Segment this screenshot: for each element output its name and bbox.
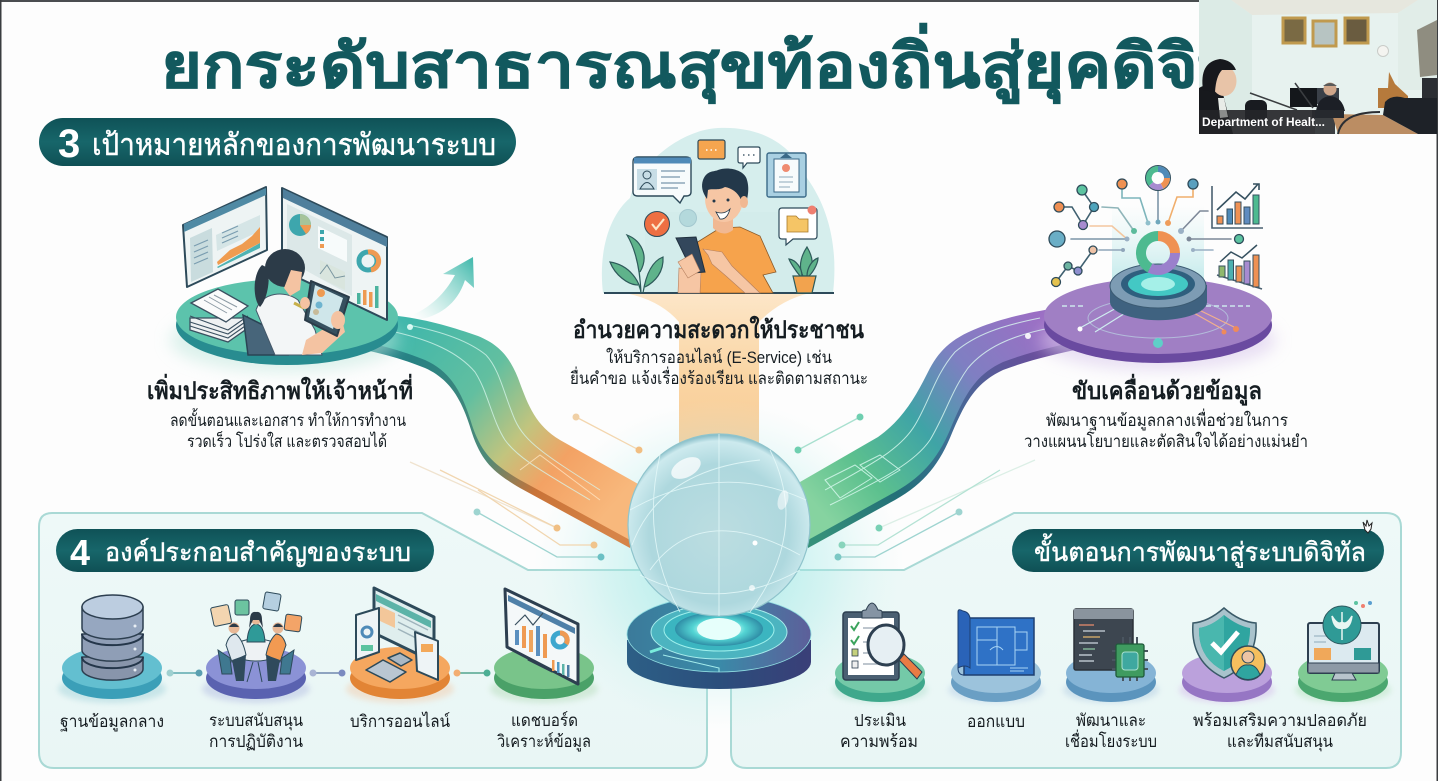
component 3: online services — [346, 588, 454, 731]
top pie icon — [1146, 166, 1170, 190]
label — [209, 711, 303, 751]
chairs — [1383, 97, 1437, 134]
goal text: citizen convenience: ยื่นคำขอ แจ้งเรื่องร้องเรียน และติดตามสถานะ — [570, 366, 868, 388]
bar chart bottom — [1217, 245, 1262, 289]
label — [1193, 711, 1367, 752]
label: ออกแบบ — [967, 712, 1025, 731]
bubble: faint circle — [680, 210, 696, 226]
goal text: staff efficiency: เพิ่มประสิทธิภาพให้เจ้าหน้าที่ — [147, 373, 413, 405]
right platform disc — [1040, 278, 1276, 370]
hub light beam — [1112, 205, 1204, 285]
window blinds — [1417, 20, 1437, 77]
disc — [1179, 653, 1275, 703]
label: ระบบสนับสนุน — [209, 711, 303, 731]
goal text: citizen convenience: ให้บริการออนไลน์ (E-Service) เช่น — [606, 347, 832, 367]
goal text: staff efficiency — [147, 373, 413, 451]
video call overlay: Department of Healt... — [1202, 115, 1325, 129]
hub cylinder — [1110, 264, 1207, 320]
wall frames — [1283, 18, 1368, 46]
label: พร้อมเสริมความปลอดภัย — [1193, 711, 1367, 730]
label — [840, 711, 918, 751]
chair — [243, 315, 288, 355]
disc — [832, 653, 928, 703]
woman — [1199, 85, 1233, 134]
glass sphere — [628, 434, 810, 616]
step 4: security and support team — [1179, 608, 1367, 752]
circuit lines right — [794, 414, 1035, 560]
label: วิเคราะห์ข้อมูล — [497, 732, 591, 752]
goal text: citizen convenience — [570, 315, 868, 388]
monitor and man — [1290, 88, 1317, 107]
officer figure — [255, 249, 349, 355]
goal text: data driven: วางแผนนโยบายและตัดสินใจได้อย่างแม่นยำ — [1024, 431, 1308, 451]
bubble: check badge — [644, 212, 670, 236]
component 1: central database — [58, 595, 166, 732]
person — [676, 168, 776, 293]
caption strip — [1199, 110, 1315, 134]
label: การปฏิบัติงาน — [209, 732, 303, 751]
goal text: citizen convenience: อำนวยความสะดวกให้ประชาชน — [573, 315, 865, 344]
goal text: staff efficiency: ลดขั้นตอนและเอกสาร ทำให้การทำงาน — [170, 408, 406, 430]
icon: monitor with medical symbol — [1308, 601, 1379, 680]
donut chart — [1141, 236, 1175, 270]
step 3: develop and integrate — [1063, 609, 1159, 751]
wall clock — [1378, 46, 1388, 56]
step 5: launch on monitor — [1295, 601, 1391, 703]
disc — [490, 647, 598, 703]
icon: blueprint — [958, 610, 1034, 675]
connector 1 — [166, 670, 202, 676]
disc — [948, 653, 1044, 703]
bubble: chat — [738, 147, 760, 168]
goal text: data driven: พัฒนาฐานข้อมูลกลางเพื่อช่วยในการ — [1046, 408, 1288, 431]
label: พัฒนาและ — [1076, 711, 1146, 730]
icon: team meeting — [210, 592, 302, 682]
shrine — [1378, 72, 1408, 108]
label: และทีมสนับสนุน — [1227, 732, 1333, 752]
left ribbon path — [355, 316, 640, 548]
disc — [58, 647, 166, 703]
background blob — [602, 128, 834, 293]
lower room dark area — [1199, 110, 1335, 134]
illustration: citizen using phone — [602, 128, 834, 294]
network nodes — [1049, 179, 1244, 286]
connector 2 — [310, 670, 346, 676]
label: ฐานข้อมูลกลาง — [60, 712, 164, 732]
label: บริการออนไลน์ — [350, 711, 450, 731]
component 4: analytics dashboard — [490, 589, 598, 752]
bubble: profile card — [633, 157, 691, 203]
left platform disc — [170, 279, 400, 372]
icon: database — [82, 595, 143, 680]
base — [627, 596, 811, 689]
screen: left monitor — [183, 187, 267, 287]
screen: right monitor — [282, 188, 387, 320]
plant pot right — [789, 247, 818, 293]
heading pill: 3 goals: 3 — [58, 122, 80, 166]
disc — [346, 647, 454, 703]
icon: shield with person — [1193, 608, 1265, 680]
disc — [1295, 653, 1391, 703]
sphere on base — [627, 434, 811, 689]
right ribbon path — [800, 308, 1085, 548]
label: ประเมิน — [854, 711, 906, 730]
goal text: staff efficiency: รวดเร็ว โปร่งใส และตรวจสอบได้ — [187, 430, 387, 451]
bubble: folder — [779, 206, 817, 245]
network lines — [1056, 189, 1231, 282]
heading pill: 4 components: 4 — [70, 532, 90, 573]
room table — [1332, 114, 1418, 134]
panel: development steps — [731, 513, 1401, 768]
icon: code window with chip — [1074, 609, 1148, 681]
glow around sphere — [534, 400, 904, 730]
heading pill: 3 goals — [39, 118, 516, 166]
icon: devices — [356, 588, 438, 682]
label: ความพร้อม — [840, 732, 918, 751]
room ceiling — [1231, 0, 1418, 15]
disc — [1063, 653, 1159, 703]
panel: four components — [39, 513, 707, 768]
goal text: data driven — [1024, 373, 1308, 451]
bubble: orange note — [698, 140, 725, 159]
icon: clipboard with magnifier — [843, 603, 922, 680]
label — [497, 711, 591, 752]
label: แดชบอร์ด — [511, 711, 578, 730]
heading pill: 4 components: องค์ประกอบสำคัญของระบบ — [105, 537, 411, 567]
illustration: officer with screens — [183, 187, 387, 355]
table line — [604, 292, 834, 294]
disc — [202, 647, 310, 703]
heading pill: 4 components — [56, 529, 434, 573]
bar chart top — [1212, 184, 1263, 228]
plant left — [610, 235, 663, 293]
papers stack — [190, 289, 248, 342]
step 1: readiness assessment — [832, 603, 928, 751]
arrow: upward growth — [410, 257, 474, 320]
icon: dashboard monitor — [505, 589, 578, 684]
bubble: clipboard — [767, 153, 806, 197]
label: เชื่อมโยงระบบ — [1065, 729, 1157, 751]
component 2: work support system — [202, 592, 310, 751]
illustration: data hub — [1049, 166, 1263, 320]
title: ยกระดับสาธารณสุขท้องถิ่นสู่ยุคดิจิทัล — [161, 23, 1287, 104]
connector 3 — [454, 670, 490, 676]
label — [1065, 711, 1157, 751]
center orange beam — [625, 293, 810, 445]
heading pill: 3 goals: เป้าหมายหลักของการพัฒนาระบบ — [92, 129, 496, 162]
circuit lines left — [410, 414, 642, 560]
video call overlay — [1199, 0, 1437, 134]
heading pill: development steps — [1012, 529, 1384, 572]
microphone — [1250, 83, 1313, 110]
chair — [1245, 100, 1267, 126]
heading pill: development steps: ขั้นตอนการพัฒนาสู่ระบบดิจิทัล — [1034, 533, 1366, 568]
goal text: data driven: ขับเคลื่อนด้วยข้อมูล — [1072, 373, 1262, 406]
cursor: hand — [1363, 520, 1372, 533]
step 2: design — [948, 610, 1044, 731]
